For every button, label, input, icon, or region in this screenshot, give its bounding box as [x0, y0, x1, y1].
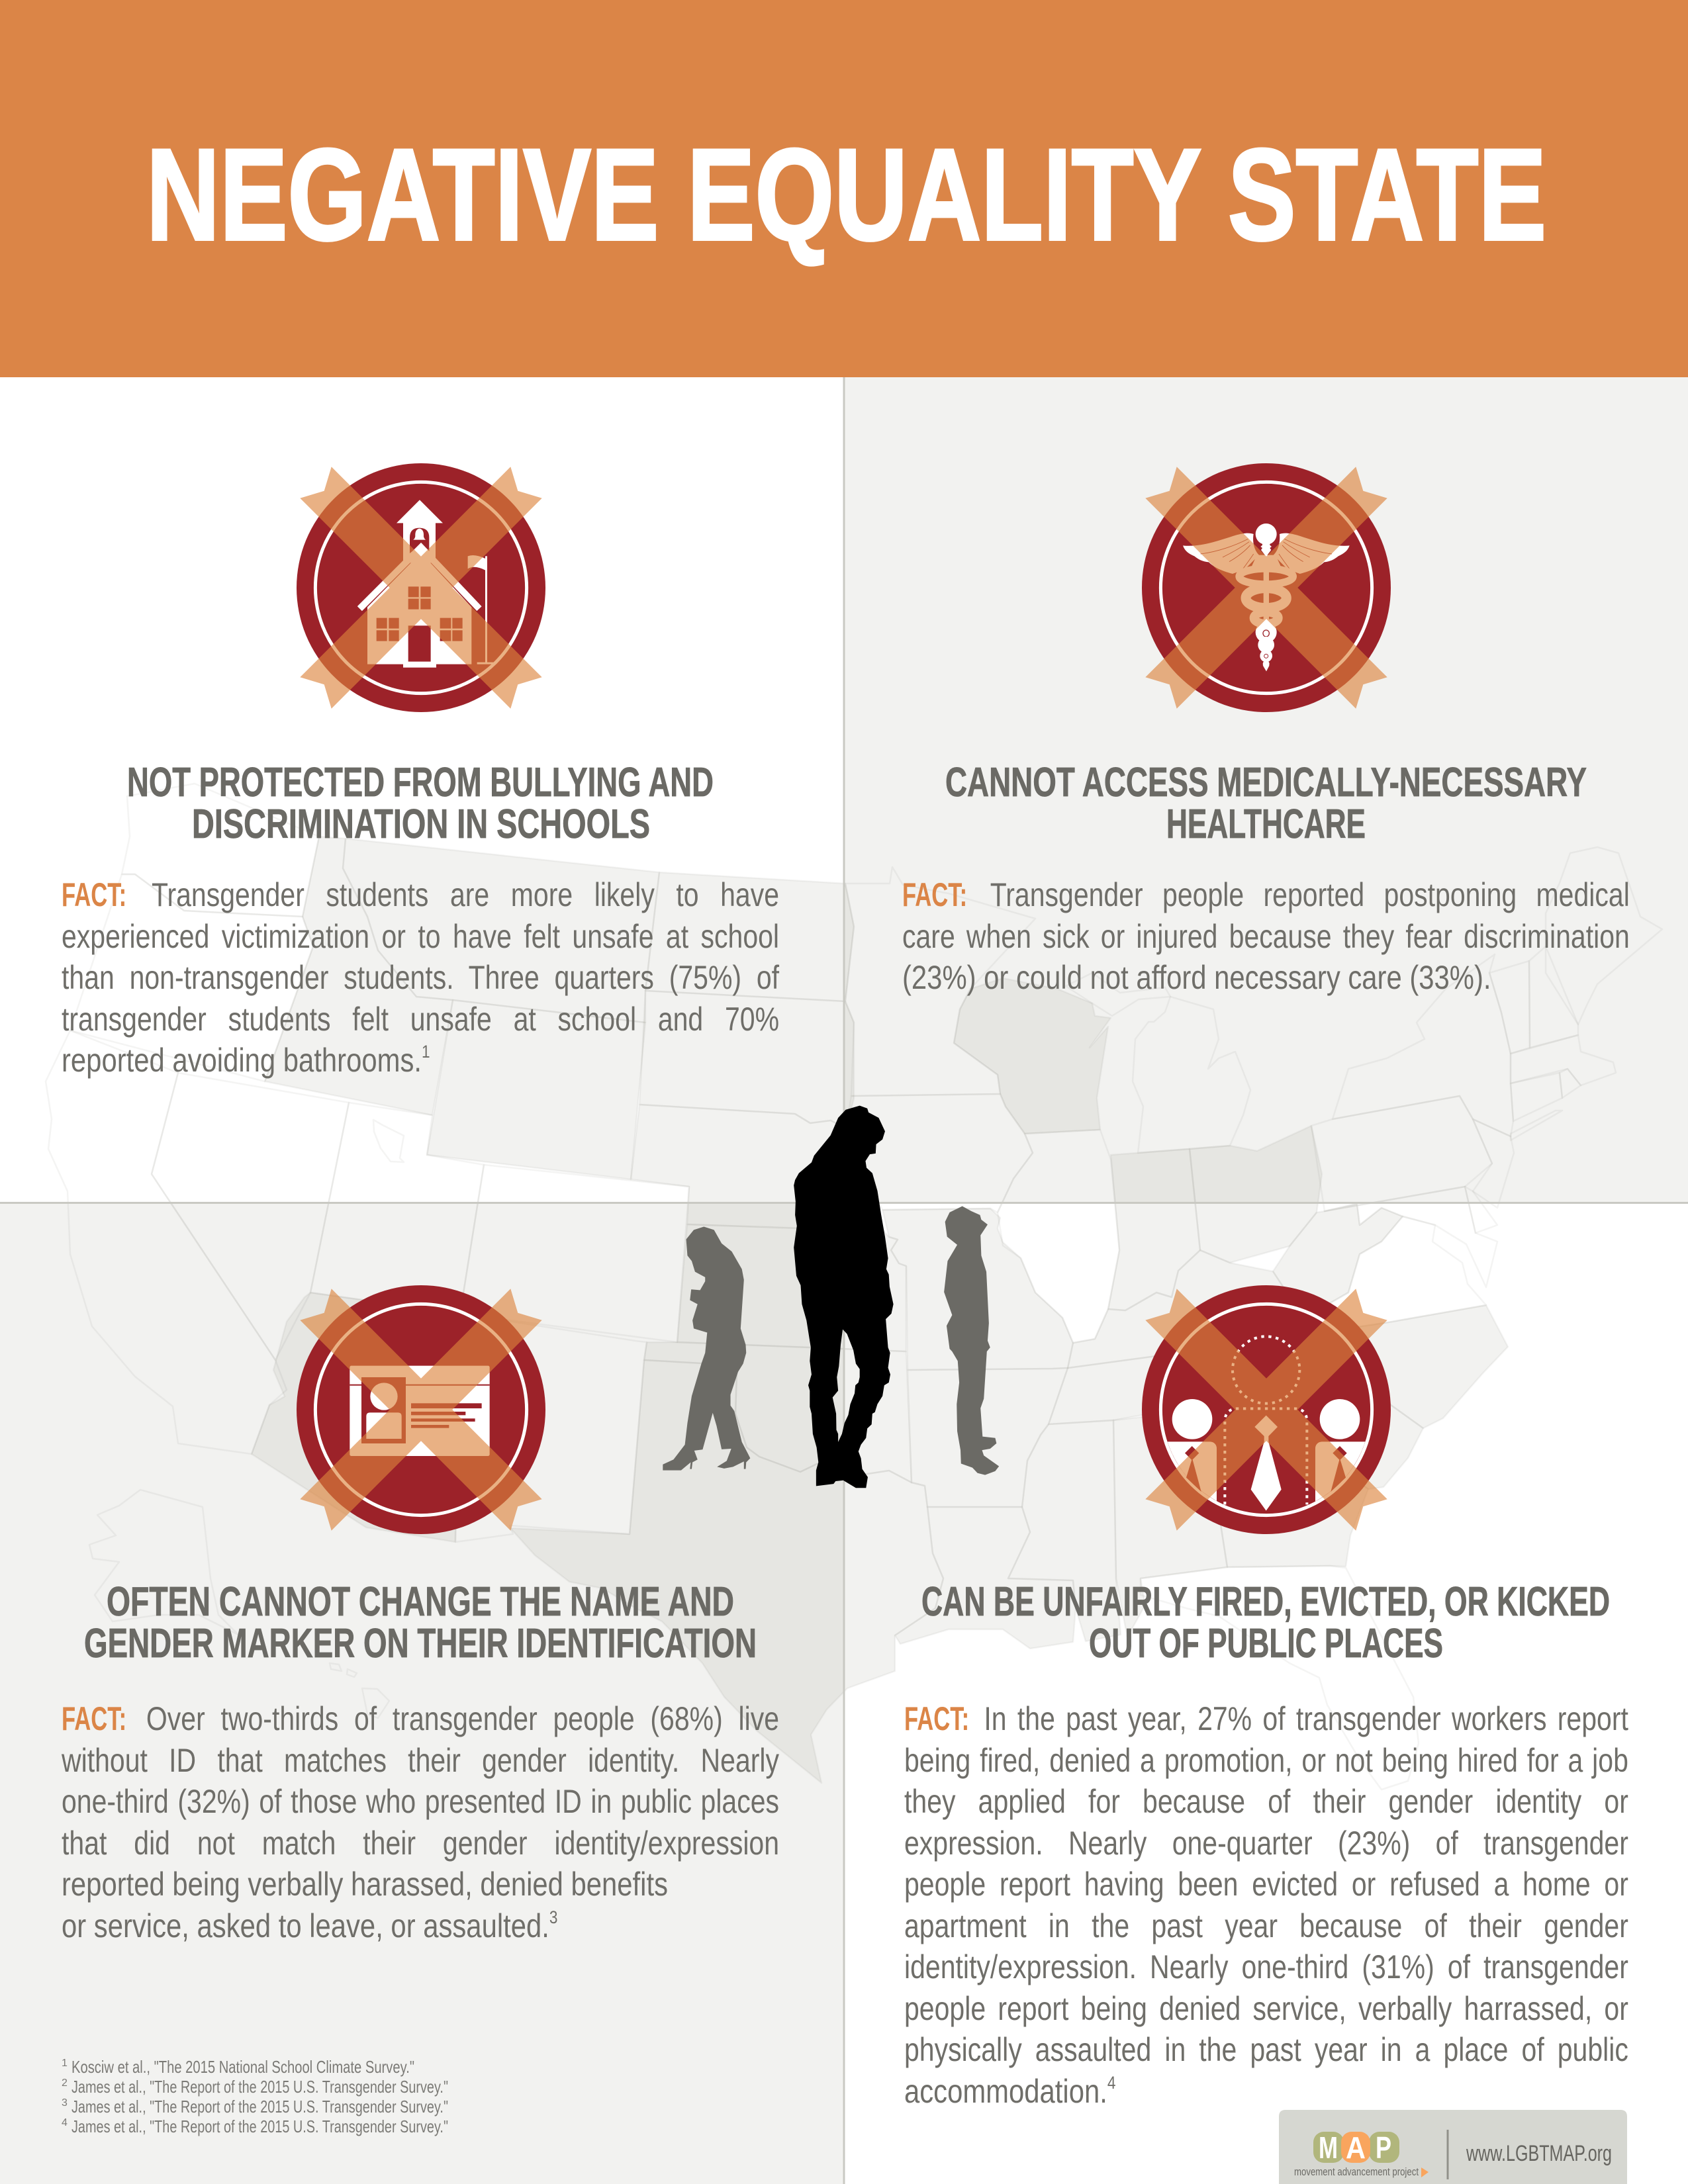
text block: employment and housing fact: apartment in the past year because of their gender	[904, 1907, 1628, 1944]
silhouette: tall central figure	[794, 1106, 894, 1488]
text block: healthcare fact	[902, 876, 1630, 996]
red X	[300, 1289, 542, 1531]
heading: fired and evicted	[921, 1579, 1610, 1666]
text block: healthcare fact: FACT:	[902, 876, 967, 913]
text block: identification fact: reported being verbally harassed, denied benefits	[62, 1866, 668, 1903]
text block: identification fact: one-third (32%) of those who presented ID in public places	[62, 1783, 779, 1820]
footnotes: 4	[62, 2117, 68, 2128]
badge circle	[297, 463, 545, 712]
footnotes: James et al., "The Report of the 2015 U.S. Transgender Survey."	[71, 2116, 448, 2136]
heading: bullying: DISCRIMINATION IN SCHOOLS	[192, 801, 650, 847]
text block: healthcare fact: Transgender people reported postponing medical	[990, 876, 1630, 913]
footnotes: James et al., "The Report of the 2015 U.S. Transgender Survey."	[71, 2077, 448, 2097]
footnotes: 2	[62, 2077, 68, 2089]
tagline arrow	[1421, 2167, 1429, 2177]
badge ring	[315, 482, 527, 694]
icon: crossed-out employees with missing person	[1142, 1285, 1391, 1534]
text block: employment and housing fact	[904, 1700, 1628, 2110]
text block: employment and housing fact: FACT:	[904, 1700, 969, 1737]
silhouette: man looking up	[944, 1206, 999, 1475]
text block: schools fact: than non-transgender students. Three quarters (75%) of	[62, 959, 779, 996]
text block: employment and housing fact: being fired, denied a promotion, or not being hired for a job	[904, 1742, 1628, 1779]
text block: employment and housing fact: identity/expression. Nearly one-third (31%) of transgender	[904, 1948, 1628, 1985]
red X	[1145, 467, 1387, 709]
header band	[0, 0, 1688, 377]
icon: crossed-out ID card	[297, 1285, 545, 1534]
heading: identification: GENDER MARKER ON THEIR IDENTIFICATION	[84, 1621, 757, 1666]
footnotes: 1	[62, 2058, 68, 2069]
logo box: MAP	[1279, 2110, 1627, 2184]
badge ring	[1160, 1304, 1372, 1516]
text block: identification fact: or service, asked to leave, or assaulted.3	[62, 1907, 557, 1944]
heading: bullying: NOT PROTECTED FROM BULLYING AND	[127, 760, 714, 805]
heading: identification	[84, 1579, 757, 1666]
MAP logo tiles: M	[1319, 2130, 1338, 2165]
text block: schools fact	[62, 876, 780, 1079]
MAP logo tiles	[1313, 2130, 1399, 2165]
text block: employment and housing fact: accommodation.4	[904, 2073, 1115, 2110]
text block: identification fact: Over two-thirds of transgender people (68%) live	[146, 1700, 779, 1737]
silhouette: woman in heels	[663, 1226, 750, 1471]
text block: employment and housing fact: physically assaulted in the past year in a place of public	[904, 2031, 1628, 2068]
text block: schools fact: Transgender students are more likely to have	[152, 876, 779, 913]
heading: healthcare: HEALTHCARE	[1166, 801, 1366, 847]
badge circle	[1142, 463, 1391, 712]
text block: identification fact: without ID that matches their gender identity. Nearly	[62, 1742, 779, 1779]
footnotes: Kosciw et al., "The 2015 National School Climate Survey."	[71, 2057, 414, 2077]
icon: crossed-out caduceus	[1142, 463, 1391, 712]
schoolhouse drawing	[359, 500, 494, 668]
footnotes: James et al., "The Report of the 2015 U.S. Transgender Survey."	[71, 2097, 448, 2116]
employees drawing	[1168, 1335, 1365, 1511]
red X	[300, 467, 542, 709]
MAP tagline: movement advancement project	[1294, 2165, 1419, 2178]
text block: employment and housing fact: In the past year, 27% of transgender workers report	[984, 1700, 1628, 1737]
text block: identification fact: FACT:	[62, 1700, 126, 1737]
heading: fired and evicted: OUT OF PUBLIC PLACES	[1089, 1621, 1443, 1666]
panel: healthcare background	[844, 377, 1688, 1203]
text block: healthcare fact: care when sick or injured because they fear discrimination	[902, 917, 1630, 954]
MAP logo tiles: A	[1346, 2130, 1366, 2165]
text block: employment and housing fact: expression. Nearly one-quarter (23%) of transgender	[904, 1824, 1628, 1861]
text block: schools fact: reported avoiding bathrooms.1	[62, 1042, 430, 1079]
badge circle	[297, 1285, 545, 1534]
ID card drawing	[350, 1366, 490, 1456]
website url: www.LGBTMAP.org	[1466, 2141, 1612, 2166]
background map of the United States	[46, 784, 1662, 1790]
MAP logo tiles: P	[1376, 2130, 1391, 2165]
text block: identification fact	[62, 1700, 779, 1944]
red X	[1145, 1289, 1387, 1531]
footnotes: 3	[62, 2097, 68, 2109]
icon: crossed-out schoolhouse	[297, 463, 545, 712]
footnotes	[62, 2057, 448, 2136]
text block: schools fact: experienced victimization or to have felt unsafe at school	[62, 917, 779, 954]
text block: employment and housing fact: people report having been evicted or refused a home or	[904, 1866, 1628, 1903]
text block: healthcare fact: (23%) or could not afford necessary care (33%).	[902, 959, 1491, 996]
heading: identification: OFTEN CANNOT CHANGE THE NAME AND	[107, 1579, 734, 1625]
text block: identification fact: that did not match their gender identity/expression	[62, 1824, 779, 1861]
caduceus drawing	[1183, 523, 1350, 671]
heading: healthcare	[945, 760, 1587, 847]
badge circle	[1142, 1285, 1391, 1534]
text block: schools fact: transgender students felt unsafe at school and 70%	[62, 1001, 779, 1038]
logo divider	[1447, 2130, 1448, 2179]
badge ring	[1160, 482, 1372, 694]
text block: schools fact: FACT:	[62, 876, 126, 913]
badge ring	[315, 1304, 527, 1516]
text block: employment and housing fact: they applied for because of their gender identity or	[904, 1783, 1628, 1820]
text block: employment and housing fact: people report being denied service, verbally harrassed, or	[904, 1989, 1628, 2026]
panel: identification background	[0, 1203, 844, 2184]
heading: bullying	[127, 760, 714, 847]
